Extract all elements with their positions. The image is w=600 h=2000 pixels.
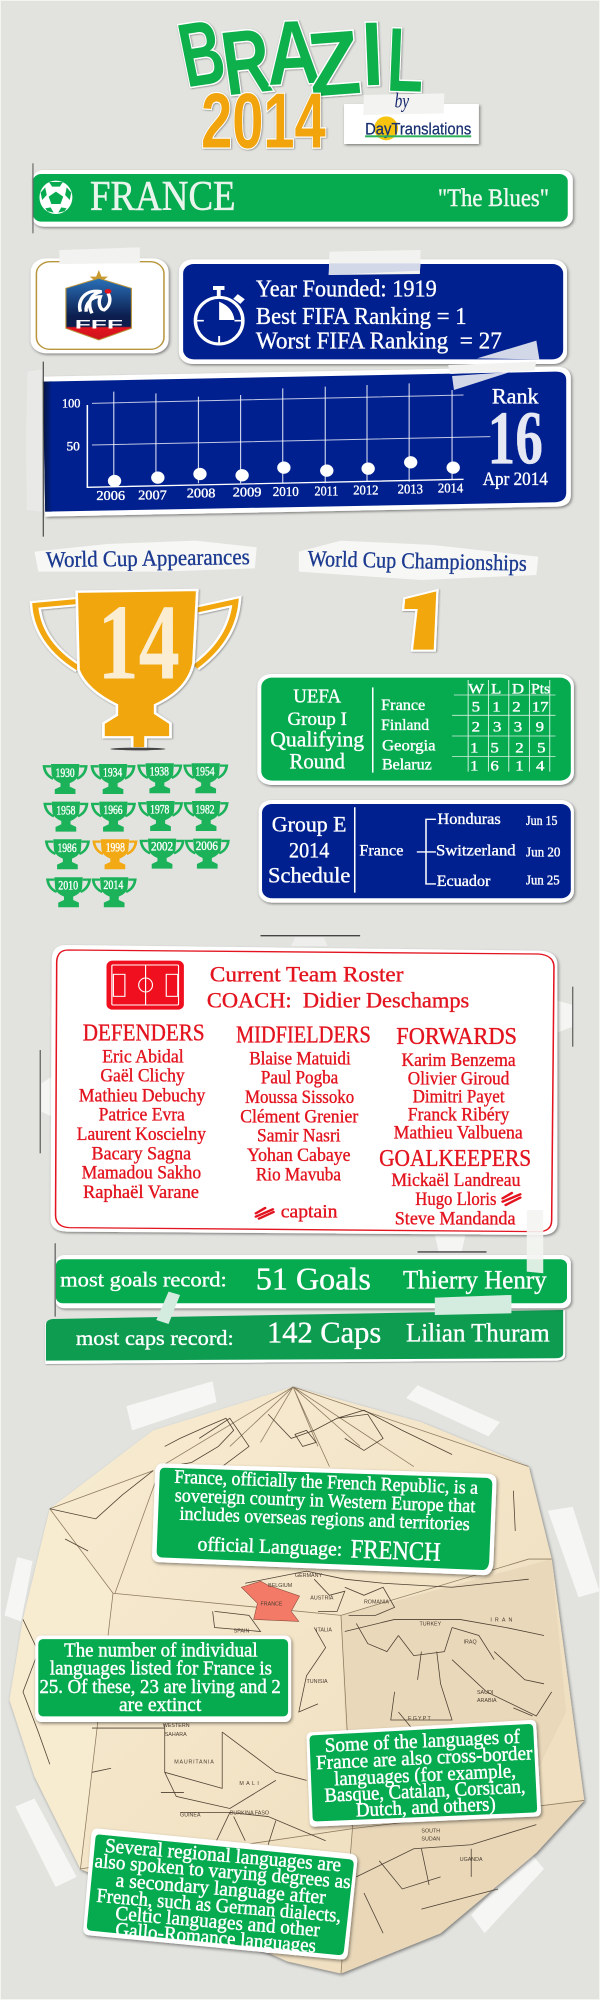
qualifying table: 6 bbox=[490, 759, 499, 774]
qualifying table: 2 bbox=[512, 700, 521, 715]
qualifying table: 3 bbox=[514, 720, 522, 735]
map country labels bbox=[163, 1573, 515, 1863]
title: Brazil: Z bbox=[303, 11, 365, 116]
chart: axis labels: 2012 bbox=[353, 483, 379, 498]
qualifying table: 1 bbox=[470, 759, 478, 774]
map country labels: FRANCE bbox=[261, 1601, 283, 1607]
panel: founding and FIFA ranking bbox=[179, 250, 567, 364]
worst FIFA ranking: Worst FIFA Ranking = 27 bbox=[256, 326, 502, 354]
qualifying table: D bbox=[512, 681, 524, 697]
panel: Group E schedule: France bbox=[359, 842, 404, 859]
callout: regional languages: also spoken to varying degrees as bbox=[94, 1850, 351, 1893]
opponents and dates: Switzerland bbox=[436, 841, 516, 859]
callout: number of languages: 25. Of these, 23 are living and 2 bbox=[39, 1676, 281, 1698]
bar: most caps record bbox=[45, 1310, 565, 1364]
callout: number of languages: The number of individual bbox=[64, 1639, 258, 1662]
callout: regional languages bbox=[83, 1829, 357, 1960]
column: defenders: DEFENDERS bbox=[83, 1019, 205, 1046]
map outlines bbox=[23, 1410, 552, 1933]
trophies: years appeared: 1978 bbox=[150, 802, 169, 816]
qualifying table: 1 bbox=[515, 759, 524, 774]
map country labels: UGANDA bbox=[460, 1857, 483, 1863]
column: forwards and goalkeepers: FORWARDS bbox=[396, 1023, 517, 1050]
map country labels: ARABIA bbox=[477, 1698, 497, 1704]
column: defenders: Laurent Koscielny bbox=[77, 1124, 206, 1145]
column: forwards and goalkeepers: Mathieu Valbuena bbox=[394, 1123, 523, 1143]
icon: football pitch bbox=[107, 961, 184, 1010]
chart: axis labels: 2008 bbox=[187, 486, 215, 501]
column: midfielders: Moussa Sissoko bbox=[245, 1087, 354, 1108]
numeral: 1 championship bbox=[403, 590, 438, 651]
label: World Cup Championships bbox=[299, 541, 538, 580]
label: World Cup Appearances: World Cup Appearances bbox=[46, 545, 250, 573]
chart: axis labels: 2009 bbox=[233, 486, 261, 500]
map country labels: SPAIN bbox=[234, 1629, 249, 1635]
world cup section bbox=[34, 541, 574, 907]
panel: UEFA group qualifying: UEFA bbox=[293, 685, 342, 707]
column: forwards and goalkeepers: GOALKEEPERS bbox=[379, 1145, 531, 1172]
banner: France bbox=[33, 163, 573, 233]
column: forwards and goalkeepers: Olivier Giroud bbox=[408, 1069, 509, 1089]
map country labels: SAUDI bbox=[477, 1690, 494, 1696]
label: World Cup Championships: World Cup Championships bbox=[307, 546, 527, 576]
column: midfielders: Yohan Cabaye bbox=[247, 1145, 351, 1166]
map country labels: GERMANY bbox=[295, 1573, 322, 1579]
column: defenders: Bacary Sagna bbox=[92, 1144, 191, 1164]
bar: most goals record: 51 Goals bbox=[256, 1262, 371, 1297]
roster and records bbox=[40, 936, 573, 1364]
callout: cross-border languages: languages (for example, bbox=[334, 1760, 516, 1790]
chart: axis labels: 2007 bbox=[138, 488, 167, 503]
map country labels: EGYPT bbox=[408, 1716, 432, 1722]
title: Brazil: L bbox=[385, 9, 426, 111]
map country labels: BELGIUM bbox=[268, 1583, 293, 1589]
panel: Group E schedule: Group E bbox=[272, 812, 347, 837]
trophies: years appeared: 1938 bbox=[150, 765, 169, 778]
map country labels: GUINEA bbox=[180, 1812, 201, 1819]
chart: axis labels: 2014 bbox=[438, 482, 464, 496]
qualifying teams: France bbox=[381, 696, 425, 714]
logo: Day Translations: DayTranslations bbox=[365, 119, 471, 138]
map country labels: MAURITANIA bbox=[174, 1759, 215, 1765]
panel: UEFA group qualifying bbox=[257, 674, 574, 785]
panel: Group E schedule bbox=[259, 800, 574, 903]
opponents and dates bbox=[436, 810, 560, 890]
year founded: Year Founded: 1919 bbox=[256, 274, 437, 302]
qualifying table: 1 bbox=[492, 700, 501, 715]
chart: axis labels: 2010 bbox=[273, 485, 299, 500]
column: defenders: Gaël Clichy bbox=[100, 1066, 185, 1086]
callout: regional languages: Celtic languages and other bbox=[115, 1902, 321, 1942]
panel: UEFA group qualifying: Qualifying bbox=[270, 727, 364, 752]
column: forwards and goalkeepers: Franck Ribéry bbox=[408, 1105, 509, 1125]
map country labels: IRAQ bbox=[464, 1639, 477, 1646]
column: defenders: Eric Abidal bbox=[102, 1047, 184, 1067]
map country labels: ROMANIA bbox=[364, 1599, 389, 1605]
title: 2014: 2014 bbox=[201, 77, 326, 164]
legend: captain: captain bbox=[281, 1202, 338, 1222]
qualifying table: 5 bbox=[472, 700, 480, 715]
column: midfielders: Samir Nasri bbox=[257, 1126, 341, 1146]
coach: COACH: Didier Deschamps bbox=[207, 988, 469, 1013]
map country labels: MALI bbox=[239, 1781, 261, 1787]
column: midfielders: Blaise Matuidi bbox=[249, 1049, 351, 1069]
legend: captain bbox=[256, 1202, 338, 1222]
column: defenders: Mamadou Sakho bbox=[82, 1163, 201, 1183]
column: forwards and goalkeepers: Karim Benzema bbox=[401, 1050, 516, 1071]
bar: most caps record: 142 Caps bbox=[267, 1317, 381, 1350]
map country labels: WESTERN bbox=[163, 1723, 190, 1729]
column: midfielders: MIDFIELDERS bbox=[236, 1021, 371, 1048]
trophies: years appeared: 1986 bbox=[57, 841, 77, 855]
callout: cross-border languages: Basque, Catalan, Corsican, bbox=[324, 1775, 526, 1807]
panel: Group E schedule: Schedule bbox=[268, 863, 350, 888]
card: FFF crest bbox=[31, 247, 169, 353]
callout: France overview: FRENCH bbox=[350, 1534, 441, 1567]
opponents and dates: Honduras bbox=[438, 810, 501, 828]
callout: number of languages: are extinct bbox=[119, 1694, 202, 1716]
bar: most goals record bbox=[55, 1243, 571, 1317]
column: forwards and goalkeepers: Steve Mandanda bbox=[395, 1209, 516, 1229]
column: forwards and goalkeepers: Mickaël Landreau bbox=[391, 1170, 520, 1191]
qualifying teams: Finland bbox=[381, 716, 430, 734]
callout: regional languages: Gallo-Romance languages bbox=[115, 1918, 317, 1957]
chart: axis labels: 100 bbox=[62, 396, 81, 410]
tape pieces bbox=[156, 1210, 543, 1324]
logo: Day Translations bbox=[344, 89, 479, 144]
map country labels: BURKINA FASO bbox=[230, 1810, 269, 1817]
chart: axis labels: 2011 bbox=[315, 484, 338, 499]
qualifying teams: Belaruz bbox=[382, 755, 432, 773]
callout: France overview: includes overseas regions and territories bbox=[179, 1503, 470, 1535]
chart axes and grid bbox=[87, 383, 490, 487]
qualifying table: 17 bbox=[532, 700, 549, 715]
title: Brazil bbox=[170, 0, 426, 116]
chart: ranking dots bbox=[108, 456, 460, 487]
qualifying table: 2 bbox=[472, 720, 480, 735]
trophy: 14 appearances: 14 bbox=[97, 583, 180, 702]
trophies: years appeared: 1934 bbox=[103, 765, 122, 779]
bar: most goals record: Thierry Henry bbox=[403, 1266, 547, 1295]
globe map bbox=[10, 1387, 584, 1973]
callout: France overview: France, officially the French Republic, is a bbox=[174, 1466, 479, 1499]
qualifying teams bbox=[381, 696, 436, 773]
bar: most caps record: Lilian Thuram bbox=[406, 1319, 550, 1348]
callout: cross-border languages: Dutch, and others) bbox=[355, 1793, 496, 1822]
qualifying teams: Georgia bbox=[382, 737, 436, 754]
callout: cross-border languages: France are also cross-border bbox=[316, 1742, 533, 1774]
qualifying table: L bbox=[491, 681, 501, 697]
opponents and dates: Ecuador bbox=[437, 872, 491, 890]
map country labels: IRAN bbox=[490, 1617, 515, 1623]
qualifying table: 5 bbox=[537, 741, 546, 756]
title: Brazil: R bbox=[215, 9, 277, 115]
opponents and dates: Jun 25 bbox=[526, 873, 560, 888]
current rank: Apr 2014 bbox=[483, 469, 548, 490]
chart: axis labels: 50 bbox=[66, 440, 80, 453]
qualifying table: 1 bbox=[470, 741, 478, 756]
chart: axis labels bbox=[62, 396, 464, 504]
facet edges bbox=[50, 1387, 584, 1973]
qualifying table: Pts bbox=[531, 681, 550, 697]
map country labels: SAHARA bbox=[165, 1732, 187, 1738]
qualifying table: W bbox=[468, 681, 484, 697]
column: defenders bbox=[77, 1019, 206, 1203]
column: defenders: Patrice Evra bbox=[99, 1105, 185, 1125]
panel: UEFA group qualifying: Group I bbox=[288, 707, 347, 730]
opponents and dates: Jun 20 bbox=[526, 845, 560, 860]
map globe and language facts bbox=[5, 1381, 600, 1973]
callout: cross-border languages: Some of the languages of bbox=[324, 1725, 521, 1757]
roster heading: Current Team Roster bbox=[210, 962, 403, 987]
callout: cross-border languages bbox=[306, 1720, 541, 1827]
title: Brazil: A bbox=[263, 1, 323, 104]
trophies: years appeared: 1998 bbox=[106, 840, 125, 854]
qualifying table: 5 bbox=[490, 741, 499, 756]
qualifying table: 2 bbox=[515, 741, 524, 756]
callout: regional languages: Several regional languages are bbox=[104, 1835, 342, 1876]
trophies: years appeared: 1930 bbox=[56, 766, 75, 780]
chart: axis labels: 2013 bbox=[398, 483, 423, 497]
qualifying table: 3 bbox=[493, 720, 502, 735]
column: defenders: Raphaël Varane bbox=[83, 1182, 199, 1203]
qualifying table: 9 bbox=[536, 720, 544, 735]
current rank bbox=[483, 384, 548, 490]
panel: rank chart bbox=[26, 362, 571, 537]
trophies: years appeared: 2010 bbox=[58, 878, 78, 892]
trophies: years appeared: 2014 bbox=[103, 878, 123, 892]
qualifying table: 4 bbox=[536, 759, 544, 774]
opponents and dates: Jun 15 bbox=[526, 814, 557, 829]
map country labels: AUSTRIA bbox=[310, 1595, 334, 1601]
callout: regional languages: French, such as German dialects, bbox=[96, 1884, 342, 1927]
callout: France overview: official Language: bbox=[197, 1533, 343, 1561]
column: midfielders: Rio Mavuba bbox=[256, 1165, 341, 1185]
bar: most goals record: most goals record: bbox=[60, 1268, 227, 1291]
best FIFA ranking: Best FIFA Ranking = 1 bbox=[256, 302, 467, 330]
callout: number of languages: languages listed for France is bbox=[50, 1657, 272, 1680]
map country labels: TURKEY bbox=[419, 1621, 442, 1628]
column: forwards and goalkeepers: Dimitri Payet bbox=[413, 1087, 505, 1107]
map country labels: TUNISIA bbox=[306, 1679, 328, 1685]
panel: team roster bbox=[51, 945, 557, 1235]
panel: UEFA group qualifying: Round bbox=[289, 750, 345, 774]
callout: regional languages: a secondary language after bbox=[115, 1869, 327, 1909]
title and logo bbox=[33, 0, 573, 233]
chart: axis labels: 2006 bbox=[96, 489, 126, 504]
map country labels: ITALIA bbox=[316, 1627, 332, 1634]
column: midfielders bbox=[236, 1021, 371, 1185]
tabs behind roster bbox=[40, 936, 573, 1252]
column: midfielders: Clément Grenier bbox=[240, 1107, 358, 1127]
column: forwards and goalkeepers: Hugo Lloris bbox=[415, 1189, 497, 1210]
title: Brazil: I bbox=[360, 3, 385, 105]
panel: Group E schedule: 2014 bbox=[289, 838, 329, 863]
trophies: years appeared: 1966 bbox=[103, 803, 123, 817]
map country labels: SUDAN bbox=[421, 1837, 440, 1843]
trophies: years appeared: 2002 bbox=[151, 839, 173, 853]
callout: number of languages bbox=[35, 1636, 291, 1722]
tape around globe bbox=[5, 1381, 600, 1933]
current rank: Rank bbox=[492, 384, 539, 409]
trophies: years appeared: 2006 bbox=[196, 839, 218, 853]
trophy: 14 appearances bbox=[35, 583, 236, 750]
icon: soccer ball bbox=[39, 181, 72, 214]
icon: stopwatch bbox=[195, 286, 245, 344]
qualifying table bbox=[452, 680, 555, 774]
column: defenders: Mathieu Debuchy bbox=[79, 1086, 205, 1106]
callout: France overview bbox=[152, 1463, 497, 1575]
callout: France overview: sovereign country in Western Europe that bbox=[174, 1485, 476, 1517]
column: midfielders: Paul Pogba bbox=[261, 1068, 338, 1088]
logo: Day Translations: by bbox=[395, 89, 409, 112]
trophies: years appeared bbox=[44, 763, 228, 907]
bar: most caps record: most caps record: bbox=[76, 1326, 234, 1350]
current rank: 16 bbox=[487, 396, 543, 480]
trophies: years appeared: 1958 bbox=[56, 803, 76, 817]
column: forwards and goalkeepers bbox=[379, 1023, 531, 1229]
map country labels: SOUTH bbox=[421, 1829, 440, 1835]
trophies: years appeared: 1982 bbox=[195, 802, 215, 816]
map: France highlighted bbox=[241, 1581, 300, 1621]
schedule bracket bbox=[417, 819, 436, 884]
card: FFF crest: FFF bbox=[75, 317, 123, 331]
nickname: "The Blues" bbox=[438, 184, 549, 212]
team name: FRANCE bbox=[90, 172, 236, 219]
team info row and rank chart bbox=[26, 247, 571, 537]
trophies: years appeared: 1954 bbox=[195, 765, 215, 778]
